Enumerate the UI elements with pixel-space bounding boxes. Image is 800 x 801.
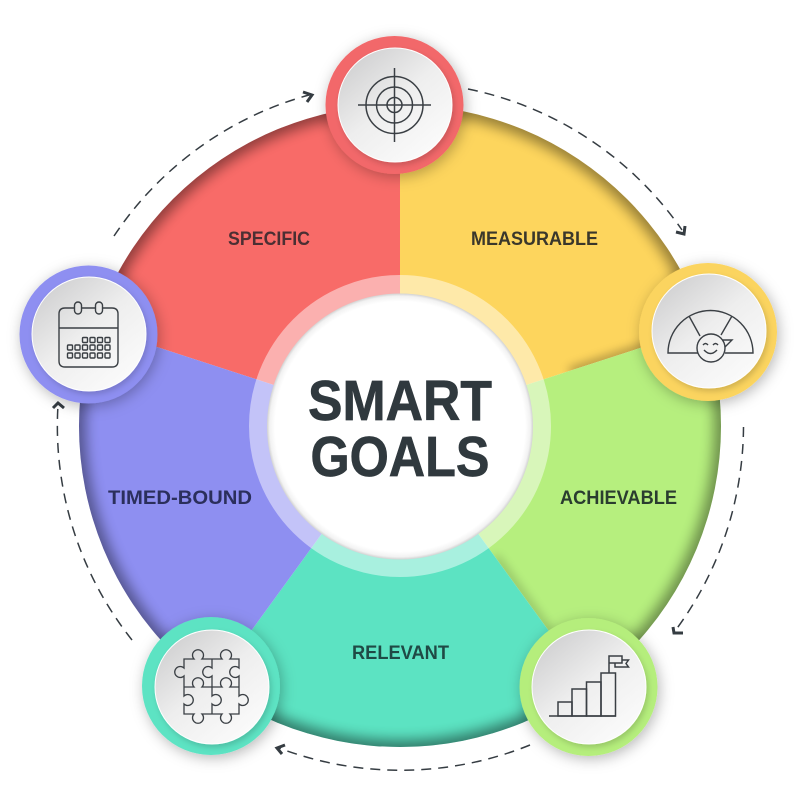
icon: calendar — [59, 302, 118, 367]
dashed arrow: timed-bound to specific — [114, 92, 312, 236]
center white circle with title — [267, 294, 533, 560]
segment: measurable — [400, 111, 680, 385]
icon: target — [358, 68, 431, 142]
icon: gauge with smiley — [668, 310, 753, 362]
label: TIMED-BOUND: TIMED-BOUND — [108, 488, 252, 509]
segment: specific — [118, 114, 400, 385]
icon: puzzle pieces — [175, 650, 248, 723]
badge: measurable gauge — [639, 263, 777, 401]
badge: specific target — [326, 36, 464, 174]
segment: timed-bound — [79, 346, 322, 640]
segment: achievable — [478, 348, 721, 640]
label: RELEVANT: RELEVANT — [352, 643, 449, 664]
dashed arrow: relevant to timed-bound — [53, 403, 132, 640]
label: SPECIFIC: SPECIFIC — [228, 229, 310, 250]
dashed arrow: measurable to achievable — [673, 427, 744, 633]
title: GOALS: GOALS — [310, 425, 490, 489]
title: SMART: SMART — [308, 369, 492, 433]
icon: steps with flag — [549, 656, 628, 716]
badge: relevant puzzle — [142, 617, 280, 755]
dashed arrow: achievable to relevant — [277, 745, 530, 770]
wheel of five segments — [79, 111, 721, 764]
center translucent ring — [258, 284, 542, 568]
label: ACHIEVABLE: ACHIEVABLE — [560, 488, 677, 509]
badge: timed-bound calendar — [20, 266, 158, 404]
badge: achievable stairs — [520, 618, 658, 756]
label: MEASURABLE: MEASURABLE — [471, 229, 598, 250]
segment: relevant — [252, 534, 549, 747]
dashed arrow: specific to measurable — [468, 89, 685, 234]
